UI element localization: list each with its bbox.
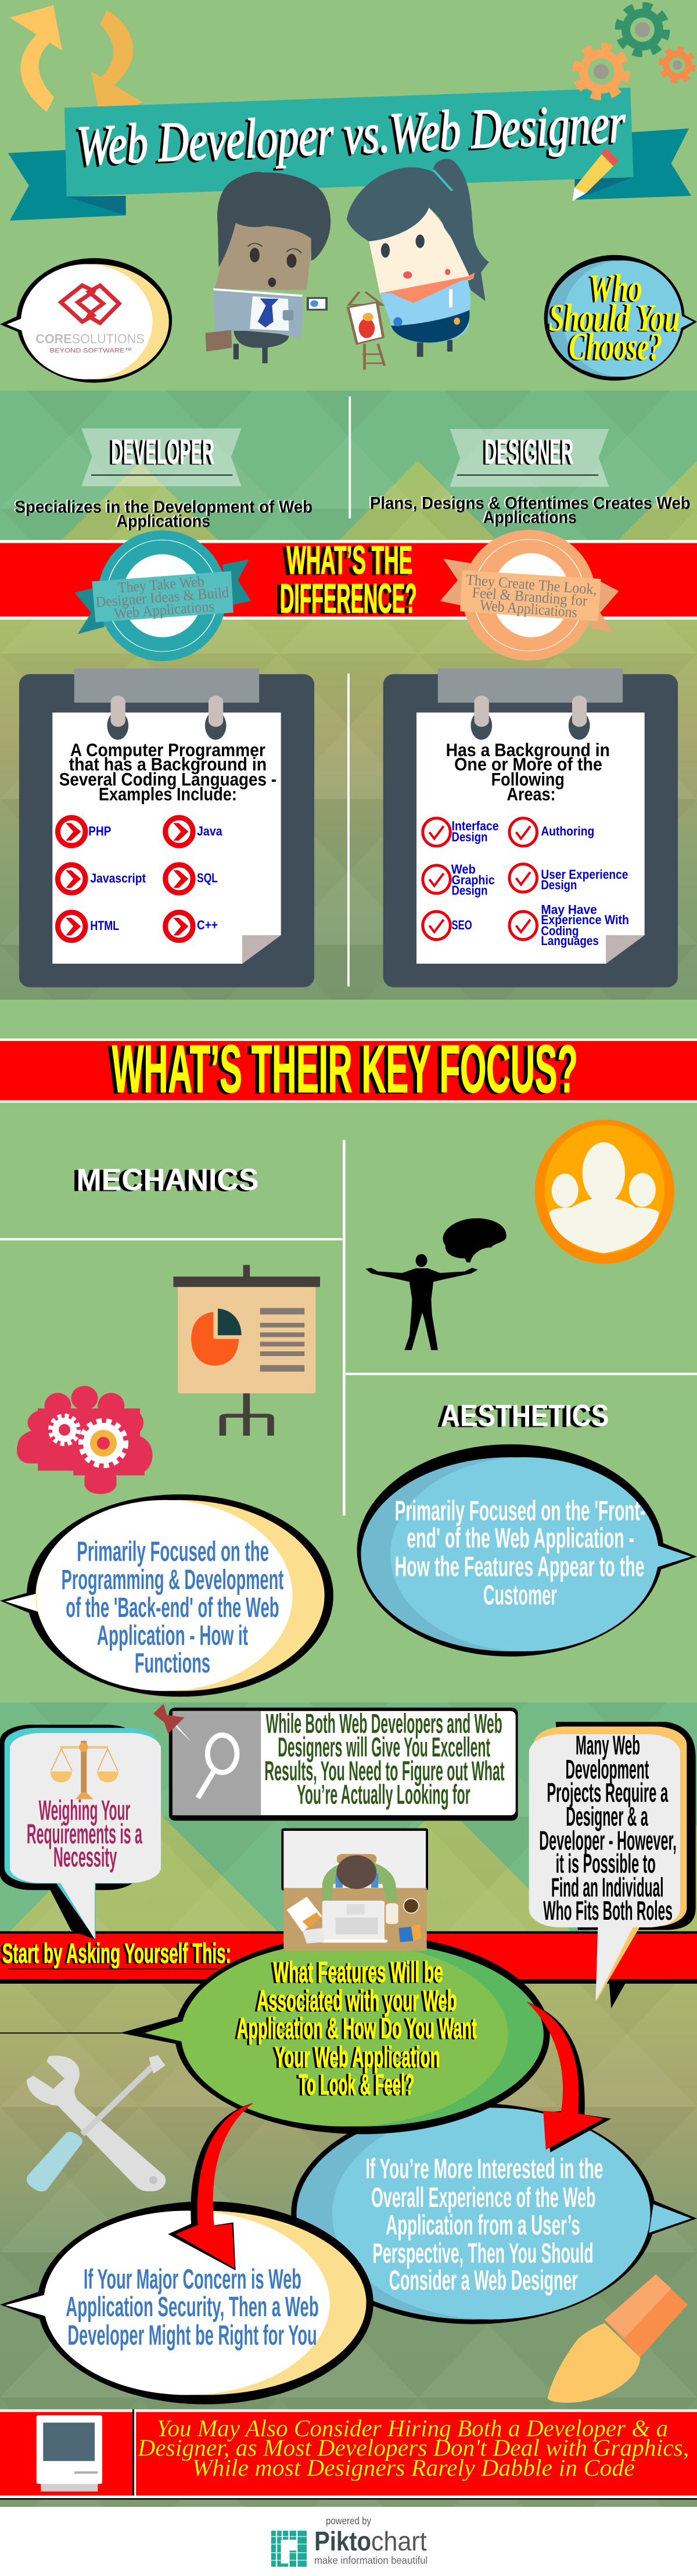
design skill list: Graphic: [452, 872, 495, 887]
coding language list: C++: [197, 918, 218, 932]
text: hiring both: [138, 2414, 689, 2481]
coding language list: PHP: [88, 824, 111, 838]
header section background: [0, 0, 697, 391]
badge: designer: [440, 530, 619, 661]
panel: designer clipboard: [383, 668, 678, 988]
bottom band and footer: chart: [371, 2526, 427, 2557]
design skill list: Authoring: [541, 824, 594, 838]
developer clipboard intro text: Examples Include:: [99, 784, 237, 804]
callout: front-end focus: [357, 1444, 697, 1656]
callout: both roles: [529, 1722, 696, 2008]
callout: back-end focus: Application - How it: [97, 1620, 248, 1651]
designer ribbon heading: [450, 429, 609, 486]
designer description: [370, 493, 691, 527]
bottom band and footer: [0, 2274, 697, 2567]
design skill list: SEO: [452, 918, 472, 932]
heading: what's the difference: [280, 538, 417, 622]
coding language list: Javascript: [90, 871, 146, 886]
icon: brain silhouette: [443, 1218, 506, 1262]
speech bubbles and choosing section top: Weighing Your: [39, 1795, 130, 1826]
decision flow: Start by Asking Yourself This:: [2, 1938, 231, 1969]
ribbon banner: [8, 88, 691, 220]
design skill list: Languages: [541, 933, 599, 948]
icon: white gears on cloud: [51, 1416, 125, 1465]
icon: red cloud with gears: [17, 1386, 152, 1494]
coding language list: Java: [197, 824, 222, 838]
icon: wrench and screwdriver: [27, 2055, 166, 2191]
speech bubbles and choosing section top: of the 'Back-end' of the Web: [66, 1592, 279, 1623]
band: start by asking: [0, 1931, 697, 1984]
coding language list: [58, 818, 222, 940]
badge text: designer: Web Applications: [479, 597, 578, 621]
header illustrations and title: [0, 5, 697, 382]
icon: gears: [577, 6, 693, 96]
heading: mechanics: MECHANICS: [77, 1162, 258, 1197]
callout: central question: [120, 1934, 550, 2134]
design skill list: Interface: [452, 819, 499, 833]
bottom band and footer: make information beautiful: [314, 2555, 427, 2566]
badge text: designer: They Create The Look,: [465, 571, 598, 598]
callout: web designer advice: [291, 2103, 697, 2324]
arrow: to web developer: [168, 2103, 253, 2270]
icon: presentation board: [173, 1265, 320, 1436]
developer clipboard intro text: A Computer Programmer: [70, 740, 265, 760]
icon: Piktochart mark: [271, 2531, 307, 2567]
Piktochart footer logo: [271, 2516, 427, 2567]
designer clipboard intro text: [446, 740, 610, 804]
clipboards and key focus heading: [0, 668, 697, 1107]
coding language list: HTML: [90, 918, 119, 933]
design skill list: Web: [451, 862, 476, 876]
arrow: to web designer: [527, 2002, 611, 2152]
band: hiring both: [0, 2409, 697, 2500]
badge text: designer: [464, 571, 598, 622]
developer clipboard intro text: [59, 740, 276, 804]
callout: weighing requirements: [0, 1725, 161, 1940]
coding language list: SQL: [197, 871, 218, 885]
speech bubbles and choosing section top: [0, 1444, 697, 2008]
developer description: Applications: [117, 511, 210, 531]
developer and designer comparison: DEVELOPER: [111, 432, 214, 471]
section background: role comparison: [0, 391, 697, 1000]
callout: central question: To Look & Feel?: [299, 2068, 414, 2101]
picture: person at desk: [281, 1829, 428, 1951]
badge text: developer: Web Applications: [113, 598, 215, 622]
callout: web developer advice: [0, 2201, 373, 2405]
footer background: [0, 2507, 697, 2576]
icon: people group: [535, 1119, 674, 1264]
callout: back-end focus: [0, 1494, 333, 1697]
design skill list: May Have: [541, 902, 597, 917]
badge: developer: [75, 530, 251, 661]
callout: Core Solutions logo: BEYOND SOFTWARE™: [50, 347, 132, 355]
icon: paint brush: [548, 2274, 688, 2403]
developer clipboard intro text: Several Coding Languages -: [59, 770, 276, 789]
speech bubbles and choosing section top: Necessity: [53, 1842, 117, 1873]
badge text: developer: They Take Web: [117, 573, 205, 596]
developer clipboard intro text: that has a Background in: [69, 754, 267, 775]
icon: refresh arrows: [10, 5, 143, 117]
developer description: [15, 498, 312, 531]
icon: human silhouette: [365, 1254, 478, 1350]
callout: Core Solutions logo: CORESOLUTIONS: [35, 332, 145, 346]
developer and designer comparison: [0, 396, 697, 661]
icon: scales: [50, 1741, 118, 1799]
icon: magnifier: [198, 1735, 237, 1798]
speech bubbles and choosing section top: Primarily Focused on the: [77, 1536, 269, 1567]
character: developer: [206, 171, 330, 363]
design skill list: Design: [541, 878, 577, 892]
icon: red pin: [153, 1704, 192, 1743]
icon: computer: [37, 2415, 102, 2492]
callout: Who Should You Choose: [544, 255, 697, 381]
design skill list: Design: [452, 883, 488, 898]
designer clipboard intro text: Following: [491, 770, 565, 789]
key focus illustrations: [0, 1119, 697, 1516]
callout: back-end focus: Functions: [135, 1648, 210, 1679]
developer description: Specializes in the Development of Web: [15, 498, 312, 517]
speech bubbles and choosing section top: Requirements is a: [27, 1819, 142, 1849]
design skill list: Coding: [541, 924, 579, 938]
design skill list: Design: [452, 829, 488, 844]
developer and designer comparison: WHAT’S THE: [287, 538, 412, 582]
designer clipboard intro text: Areas:: [506, 784, 556, 804]
badge text: developer: Designer Ideas & Build: [95, 584, 229, 611]
badge text: developer: [94, 571, 231, 623]
icon: pencil: [573, 148, 619, 201]
panel: developer clipboard: [19, 668, 314, 988]
red band: [0, 540, 697, 620]
character: designer: [347, 159, 489, 370]
decision flow: [0, 1829, 697, 2405]
designer description: Applications: [483, 508, 577, 527]
developer ribbon heading: [81, 428, 242, 486]
key focus band: [0, 1031, 697, 1107]
panel: search note: [169, 1708, 518, 1821]
Piktochart footer logo: powered by: [326, 2516, 371, 2527]
callout: Core Solutions logo: [0, 258, 172, 382]
badge text: designer: Feel & Branding for: [472, 584, 588, 609]
Piktochart footer logo: Pikto: [314, 2526, 371, 2557]
design skill list: [423, 818, 629, 948]
section background: how to choose: [0, 1702, 697, 2507]
section background: key focus: [0, 1000, 697, 1702]
